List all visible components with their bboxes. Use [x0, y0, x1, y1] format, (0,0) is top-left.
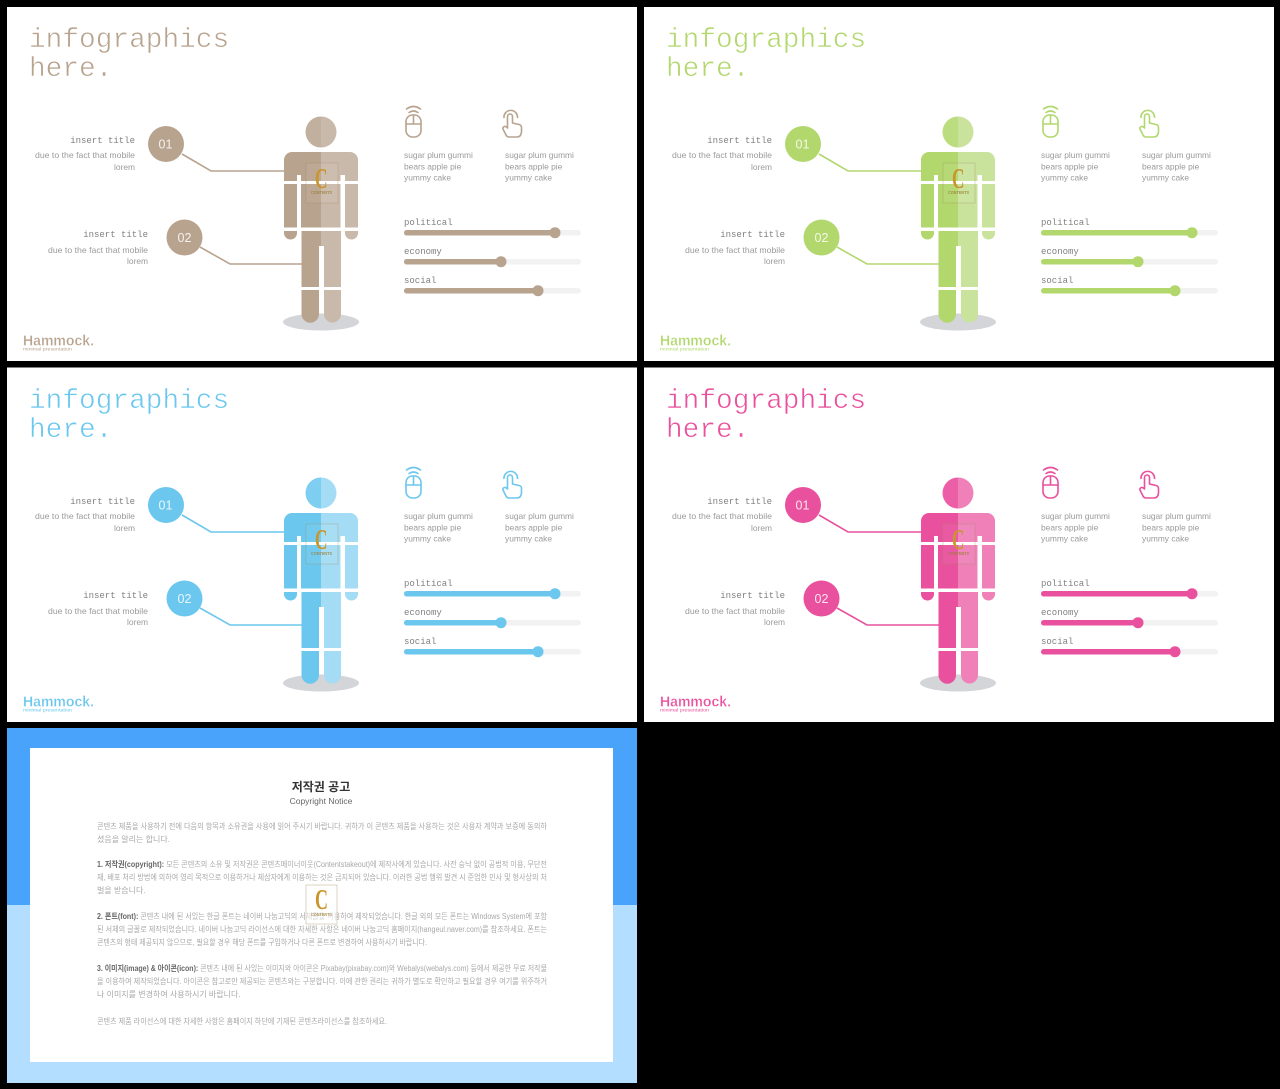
- feature text right: sugar plum gummi: [505, 150, 574, 160]
- bar: economy: economy: [404, 247, 442, 257]
- callout 02 text: insert title: [720, 591, 785, 601]
- feature text left: [404, 150, 473, 182]
- human figure: [920, 116, 996, 330]
- panel: blue infographic: [7, 368, 637, 722]
- icon: wireless mouse: [1043, 468, 1058, 498]
- bar: social: social: [404, 276, 436, 286]
- section 1: copyright: [97, 859, 547, 895]
- callout 01 badge: [148, 126, 184, 162]
- callout 01 text: due to the fact that mobile: [672, 150, 772, 160]
- connector 02: [837, 247, 940, 264]
- section 3: image and icon: [97, 963, 547, 999]
- bar: political: political: [404, 218, 453, 228]
- watermark: gold C badge: CONTENTS: [948, 190, 969, 195]
- title: infographics: [666, 386, 866, 417]
- feature text right: sugar plum gummi: [1142, 511, 1211, 521]
- watermark: gold C badge: C: [952, 524, 964, 556]
- section 1: copyright: 재, 배포 처리 방법에 의하여 영리 목적으로 이용하거나 제삼자에게 이용하는 것은 금지되어 있습니다. 이러한 공법 행위 발견 시 준엄한 민사 및 형사상의 처: [97, 872, 547, 882]
- feature text right: [505, 150, 574, 182]
- watermark: gold C badge: CONTENTS: [311, 190, 332, 195]
- callout 01 badge: 01: [796, 138, 809, 152]
- callout 01 badge: [785, 126, 821, 162]
- feature text right: yummy cake: [505, 172, 552, 182]
- icon: touch hand: [1140, 110, 1158, 137]
- bar: political: [404, 218, 581, 238]
- watermark: gold C badge: [306, 884, 337, 924]
- human figure: [283, 116, 359, 330]
- watermark: gold C badge: CONTENTS: [948, 551, 969, 556]
- feature text right: bears apple pie: [1142, 522, 1200, 532]
- notice heading: 저작권 공고: [292, 779, 350, 794]
- callout 01 text: [672, 136, 772, 172]
- callout 02 text: insert title: [83, 591, 148, 601]
- icon: touch hand: [1140, 471, 1158, 498]
- callout 02 badge: [804, 580, 840, 616]
- bar: social: social: [1041, 637, 1073, 647]
- bar: economy: economy: [1041, 608, 1079, 618]
- logo: Hammock.: [23, 332, 94, 350]
- feature text right: sugar plum gummi: [505, 511, 574, 521]
- callout 01 text: lorem: [751, 162, 772, 172]
- human figure: [920, 478, 996, 692]
- bar: social: social: [404, 637, 436, 647]
- connector 01: [182, 515, 285, 532]
- callout 02 text: insert title: [720, 230, 785, 240]
- watermark: gold C badge: CONTENTS: [311, 912, 332, 917]
- bar: political: [1041, 579, 1218, 599]
- callout 01 text: due to the fact that mobile: [672, 511, 772, 521]
- section 3: image and icon: 을 이용하여 제작되었습니다. 아이콘은 참고로만 제공되는 콘텐츠와는 구분합니다. 이에 관한 권리는 귀하가 별도로 확인하고 필요할 경우 여기를 위주하거: [97, 976, 547, 986]
- callout 02 text: due to the fact that mobile: [48, 606, 148, 616]
- callout 02 badge: [166, 580, 202, 616]
- logo: Hammock.: [660, 332, 731, 350]
- feature text left: [404, 511, 473, 544]
- icon: wireless mouse: [406, 468, 421, 498]
- title: here.: [666, 54, 749, 85]
- feature text right: sugar plum gummi: [1142, 150, 1211, 160]
- section 3: image and icon: 나 이미지를 변경하여 사용하시기 바랍니다.: [97, 989, 241, 999]
- callout 01 badge: 01: [159, 498, 172, 512]
- callout 02 text: [685, 230, 785, 266]
- title: here.: [666, 415, 749, 446]
- callout 01 text: insert title: [70, 497, 135, 507]
- callout 02 badge: [804, 220, 840, 256]
- icon: wireless mouse: [1043, 106, 1058, 137]
- callout 02 text: lorem: [127, 256, 148, 266]
- callout 01 badge: 01: [796, 498, 809, 512]
- watermark: gold C badge: C: [315, 884, 328, 916]
- section 2: font: 2. 폰트(font): 콘텐츠 내에 된 서있는 한글 폰트는 네이버 나눔고딕의 서체들을 사용하여 제작되었습니다. 한글 외의 모든 폰트는 Windows System에 포함: [97, 911, 548, 921]
- notice heading: [290, 779, 353, 806]
- section 2: font: 된 서체의 글꼴로 제작되었습니다. 네이버 나눔고딕 라이선스에 대한 자세한 사항은 네이버 나눔고딕 홈페이지(hangeul.naver.com)를 참조하세요. 폰트는: [97, 924, 547, 934]
- callout 02 text: lorem: [127, 617, 148, 627]
- callout 02 text: [48, 591, 148, 627]
- title: here.: [29, 54, 112, 85]
- callout 01 text: due to the fact that mobile: [35, 150, 135, 160]
- callout 01 text: insert title: [707, 136, 772, 146]
- feature text right: [1142, 150, 1211, 182]
- human figure: [283, 478, 359, 692]
- logo: minimal presentation: [660, 346, 710, 352]
- bar: economy: [1041, 608, 1218, 628]
- title: [666, 25, 866, 85]
- feature text left: [1041, 511, 1110, 544]
- title: here.: [29, 415, 112, 446]
- title: infographics: [29, 25, 229, 56]
- bar: social: [404, 276, 581, 296]
- panel: pink infographic: [644, 368, 1274, 722]
- callout 01 text: due to the fact that mobile: [35, 511, 135, 521]
- bar: economy: economy: [1041, 247, 1079, 257]
- callout 02 text: due to the fact that mobile: [685, 245, 785, 255]
- bar: economy: [404, 247, 581, 267]
- connector 01: [819, 154, 922, 171]
- intro paragraph: [97, 821, 548, 844]
- bar: political: [404, 579, 581, 599]
- feature text left: yummy cake: [404, 534, 451, 544]
- callout 01 badge: 01: [159, 138, 172, 152]
- bar: economy: [1041, 247, 1218, 267]
- section 1: copyright: 벌을 받습니다.: [97, 885, 146, 895]
- feature text right: [505, 511, 574, 544]
- feature text left: yummy cake: [1041, 534, 1088, 544]
- watermark: gold C badge: CONTENTS: [311, 551, 332, 556]
- bar: social: [404, 637, 581, 657]
- callout 02 text: lorem: [764, 617, 785, 627]
- logo: minimal presentation: [23, 708, 73, 712]
- icon: wireless mouse: [406, 106, 421, 137]
- feature text left: bears apple pie: [404, 162, 462, 172]
- connector 02: [200, 247, 303, 264]
- bar: social: [1041, 637, 1218, 657]
- feature text left: yummy cake: [404, 172, 451, 182]
- bar: economy: economy: [404, 608, 442, 618]
- callout 02 text: [685, 591, 785, 627]
- watermark: gold C badge: C: [952, 163, 964, 195]
- feature text right: bears apple pie: [505, 522, 563, 532]
- section 3: image and icon: 3. 이미지(image) & 아이콘(icon): 콘텐츠 내에 된 사있는 이미지와 아이콘은 Pixabay(pixabay.com)와 Webalys(webalys.com) 등에서 제공한 무료 저작물: [97, 963, 547, 973]
- title: infographics: [666, 25, 866, 56]
- watermark: gold C badge: [306, 524, 338, 564]
- bar: economy: [404, 608, 581, 628]
- callout 02 text: due to the fact that mobile: [685, 606, 785, 616]
- logo: minimal presentation: [660, 708, 710, 712]
- bar: political: political: [404, 579, 453, 589]
- section 2: font: [97, 911, 548, 947]
- callout 02 badge: [166, 220, 202, 256]
- logo: Hammock.: [660, 694, 731, 710]
- title: [29, 386, 229, 446]
- bar: social: social: [1041, 276, 1073, 286]
- bar: social: [1041, 276, 1218, 296]
- connector 01: [819, 515, 922, 532]
- closing line: 콘텐츠 제품 라이선스에 대한 자세한 사항은 홈페이지 하단에 기재된 콘텐츠라이선스를 참조하세요.: [97, 1016, 387, 1026]
- feature text left: bears apple pie: [1041, 522, 1099, 532]
- callout 01 text: lorem: [751, 523, 772, 533]
- callout 02 text: [48, 230, 148, 266]
- callout 02 badge: 02: [815, 231, 828, 245]
- connector 02: [837, 608, 940, 625]
- watermark: gold C badge: [306, 163, 338, 203]
- callout 01 text: insert title: [707, 497, 772, 507]
- feature text left: sugar plum gummi: [1041, 150, 1110, 160]
- callout 01 text: lorem: [114, 162, 135, 172]
- feature text left: bears apple pie: [404, 522, 462, 532]
- connector 01: [182, 154, 285, 171]
- notice heading: Copyright Notice: [290, 796, 353, 806]
- connector 02: [200, 608, 303, 625]
- bar: political: [1041, 218, 1218, 238]
- feature text left: bears apple pie: [1041, 162, 1099, 172]
- feature text left: sugar plum gummi: [404, 511, 473, 521]
- callout 02 text: due to the fact that mobile: [48, 245, 148, 255]
- callout 02 text: insert title: [83, 230, 148, 240]
- logo: minimal presentation: [23, 346, 73, 352]
- callout 02 badge: 02: [178, 231, 191, 245]
- logo: Hammock.: [23, 694, 94, 710]
- callout 01 text: insert title: [70, 136, 135, 146]
- bar: political: political: [1041, 579, 1090, 589]
- feature text right: bears apple pie: [505, 162, 563, 172]
- panel: copyright notice: [7, 728, 637, 1083]
- watermark: gold C badge: C: [315, 524, 328, 556]
- title: [666, 386, 866, 446]
- feature text left: sugar plum gummi: [404, 150, 473, 160]
- feature text right: yummy cake: [505, 534, 552, 544]
- panel: tan infographic: [7, 7, 637, 361]
- callout 02 text: lorem: [764, 256, 785, 266]
- section 2: font: 콘텐츠의 형태 제공되지 않으므로, 필요할 경우 해당 폰트를 구입하거나 다른 폰트로 변경하여 사용하시기 바랍니다.: [97, 937, 427, 947]
- feature text right: [1142, 511, 1211, 544]
- callout 01 text: [672, 497, 772, 533]
- feature text left: sugar plum gummi: [1041, 511, 1110, 521]
- callout 01 badge: [148, 487, 184, 523]
- watermark: gold C badge: C: [315, 163, 328, 195]
- intro paragraph: 셨음을 알리는 합니다.: [97, 834, 170, 844]
- feature text right: yummy cake: [1142, 172, 1189, 182]
- panel: green infographic: [644, 7, 1274, 361]
- feature text left: yummy cake: [1041, 172, 1088, 182]
- callout 01 text: lorem: [114, 523, 135, 533]
- callout 01 text: [35, 136, 135, 172]
- title: [29, 25, 229, 85]
- callout 01 badge: [785, 487, 821, 523]
- callout 02 badge: 02: [815, 592, 828, 606]
- feature text left: [1041, 150, 1110, 182]
- icon: touch hand: [503, 471, 522, 498]
- title: infographics: [29, 386, 229, 417]
- feature text right: bears apple pie: [1142, 162, 1200, 172]
- section 1: copyright: 1. 저작권(copyright): 모든 콘텐츠의 소유 및 저작권은 콘텐츠메이너이웃(Contentstakeout)에 제작사에게 있습니다. 사전 승낙 없이 공법적 이용, 무단전: [97, 859, 547, 869]
- callout 02 badge: 02: [178, 592, 191, 606]
- icon: touch hand: [503, 110, 522, 137]
- bar: political: political: [1041, 218, 1090, 228]
- watermark: gold C badge: [943, 163, 975, 203]
- intro paragraph: 콘텐츠 제품을 사용하기 전에 다음의 항목과 소유권을 사용에 읽어 주시기 바랍니다. 귀하가 이 콘텐츠 제품을 사용하는 것은 사용자 계약과 보증에 동의하: [97, 821, 548, 831]
- feature text right: yummy cake: [1142, 534, 1189, 544]
- watermark: gold C badge: [943, 524, 975, 564]
- callout 01 text: [35, 497, 135, 533]
